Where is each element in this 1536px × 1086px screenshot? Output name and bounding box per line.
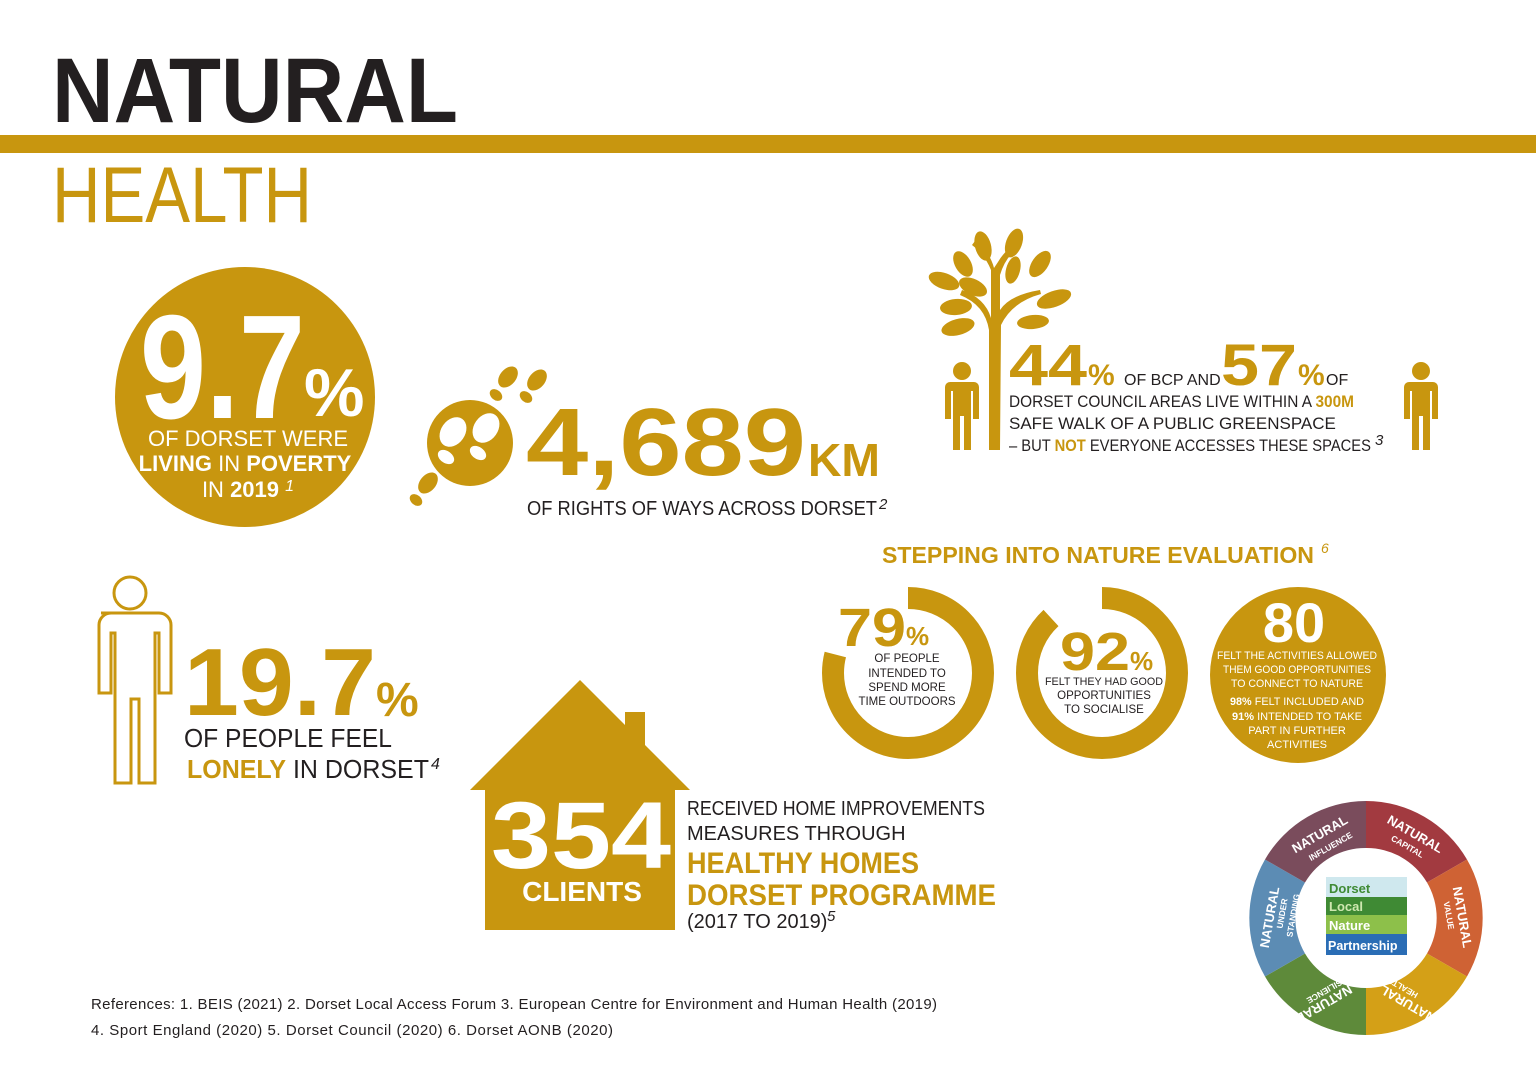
icon: house — [470, 680, 690, 930]
text: greenspace stat: DORSET COUNCIL AREAS LIVE WITHIN A 300M — [1009, 392, 1354, 411]
logo: nature partnership wheel: STANDING — [1284, 893, 1302, 938]
stat: rights of way — [526, 389, 888, 520]
chart: donut 92%: TO SOCIALISE — [1064, 704, 1144, 716]
text: greenspace stat: – BUT NOT EVERYONE ACCESSES THESE SPACES — [1009, 436, 1371, 455]
logo: nature partnership wheel: UNDER — [1274, 898, 1290, 929]
logo: nature partnership wheel: INFLUENCE — [1307, 830, 1354, 863]
panel: poverty circle: OF DORSET WERE — [148, 426, 348, 451]
text: greenspace stat — [1009, 333, 1384, 455]
title: NATURAL — [52, 40, 458, 142]
text: greenspace stat: OF — [1326, 372, 1348, 389]
panel: poverty circle: IN 2019 — [202, 477, 279, 502]
text: healthy homes: DORSET PROGRAMME — [687, 879, 996, 912]
chart: donut 92%: % — [1130, 646, 1153, 676]
chart: donut 79%: OF PEOPLE — [874, 653, 940, 665]
panel: poverty circle: 1 — [285, 478, 294, 495]
chart: donut 79%: % — [906, 621, 929, 651]
logo: nature partnership wheel: NATURAL — [1385, 812, 1446, 856]
chart: circle 80: 98% FELT INCLUDED AND — [1230, 696, 1364, 708]
chart: circle 80: PART IN FURTHER — [1248, 725, 1346, 737]
chart: donut 92%: OPPORTUNITIES — [1057, 690, 1151, 702]
chart: donut 79%: TIME OUTDOORS — [858, 696, 956, 708]
logo: nature partnership wheel: RESILIENCE — [1305, 972, 1354, 1006]
stat: rights of way: KM — [808, 434, 880, 486]
panel: poverty circle: LIVING IN POVERTY — [139, 451, 352, 476]
icon: house: 354 — [491, 783, 671, 889]
chart: donut 79%: 79 — [838, 598, 906, 658]
stat: rights of way: OF RIGHTS OF WAYS ACROSS DORSET — [527, 498, 877, 520]
text: healthy homes: (2017 TO 2019) — [687, 911, 827, 933]
logo: nature partnership wheel: NATURAL — [1257, 885, 1282, 949]
text: greenspace stat: 44 — [1009, 333, 1087, 398]
logo: nature partnership wheel: NATURAL — [1450, 885, 1475, 949]
logo: nature partnership wheel: NATURAL — [1377, 982, 1438, 1026]
logo: nature partnership wheel: Dorset — [1329, 881, 1371, 896]
chart: circle 80: ACTIVITIES — [1267, 739, 1327, 751]
logo: nature partnership wheel — [1249, 801, 1483, 1035]
text: healthy homes: MEASURES THROUGH — [687, 823, 906, 845]
stat: lonely: % — [376, 674, 419, 727]
chart: circle 80: TO CONNECT TO NATURE — [1231, 678, 1363, 690]
icon: footprints — [407, 363, 551, 508]
chart: circle 80: THEM GOOD OPPORTUNITIES — [1223, 664, 1371, 676]
chart: circle 80: 91% INTENDED TO TAKE — [1232, 711, 1362, 723]
chart: donut 79%: INTENDED TO — [868, 668, 946, 680]
chart: donut 92%: 92 — [1060, 622, 1130, 682]
logo: nature partnership wheel: NATURAL — [1289, 812, 1350, 856]
text: greenspace stat: 57 — [1221, 333, 1297, 398]
heading: stepping into nature: 6 — [1321, 540, 1329, 556]
icon: house: CLIENTS — [522, 876, 642, 907]
logo: nature partnership wheel: CAPITAL — [1389, 833, 1426, 860]
stat: rights of way: 2 — [878, 496, 888, 513]
chart: circle 80: 80 — [1263, 591, 1325, 654]
chart: donut 79%: SPEND MORE — [868, 682, 946, 694]
text: healthy homes: 5 — [827, 908, 836, 925]
icon: tree — [926, 226, 1074, 450]
text: greenspace stat: % — [1298, 359, 1325, 392]
panel: poverty circle — [115, 267, 375, 527]
chart: circle 80: FELT THE ACTIVITIES ALLOWED — [1217, 650, 1377, 662]
stat: lonely: 4 — [431, 756, 440, 773]
text: healthy homes: HEALTHY HOMES — [687, 847, 919, 880]
logo: nature partnership wheel: Local — [1329, 899, 1363, 914]
logo: nature partnership wheel: Nature — [1329, 918, 1370, 933]
icon: person outline — [99, 577, 171, 783]
heading: stepping into nature: STEPPING INTO NATURE EVALUATION — [882, 542, 1314, 568]
references: References: 1. BEIS (2021) 2. Dorset Local Access Forum 3. European Centre for Environment and Human Health (2019) — [91, 996, 937, 1013]
references: 4. Sport England (2020) 5. Dorset Council (2020) 6. Dorset AONB (2020) — [91, 1022, 613, 1039]
text: greenspace stat: OF BCP AND — [1124, 372, 1221, 389]
panel: poverty circle: % — [304, 355, 364, 431]
text: greenspace stat: SAFE WALK OF A PUBLIC GREENSPACE — [1009, 414, 1336, 433]
text: greenspace stat: 3 — [1375, 432, 1384, 449]
logo: nature partnership wheel: Partnership — [1328, 939, 1398, 953]
logo: nature partnership wheel: HEALTH — [1385, 975, 1420, 1000]
text: healthy homes: RECEIVED HOME IMPROVEMENTS — [687, 798, 985, 820]
chart: circle 80 — [1210, 587, 1386, 763]
stat: lonely: OF PEOPLE FEEL — [184, 723, 392, 753]
references — [91, 996, 937, 1039]
chart: donut 92%: FELT THEY HAD GOOD — [1045, 676, 1163, 688]
subtitle: HEALTH — [52, 150, 312, 239]
chart: donut 79% — [833, 598, 983, 748]
logo: nature partnership wheel: VALUE — [1442, 901, 1456, 931]
icon: person right — [1404, 362, 1438, 450]
chart: donut 92% — [1027, 598, 1177, 748]
logo: nature partnership wheel: NATURAL — [1294, 982, 1355, 1026]
stat: lonely — [184, 629, 440, 784]
text: greenspace stat: % — [1088, 359, 1115, 392]
stat: lonely: LONELY IN DORSET — [187, 754, 429, 784]
icon: person left — [945, 362, 979, 450]
stat: rights of way: 4,689 — [526, 389, 806, 496]
stat: lonely: 19.7 — [184, 629, 376, 736]
text: healthy homes — [687, 798, 996, 933]
panel: poverty circle: 9.7 — [140, 285, 305, 450]
